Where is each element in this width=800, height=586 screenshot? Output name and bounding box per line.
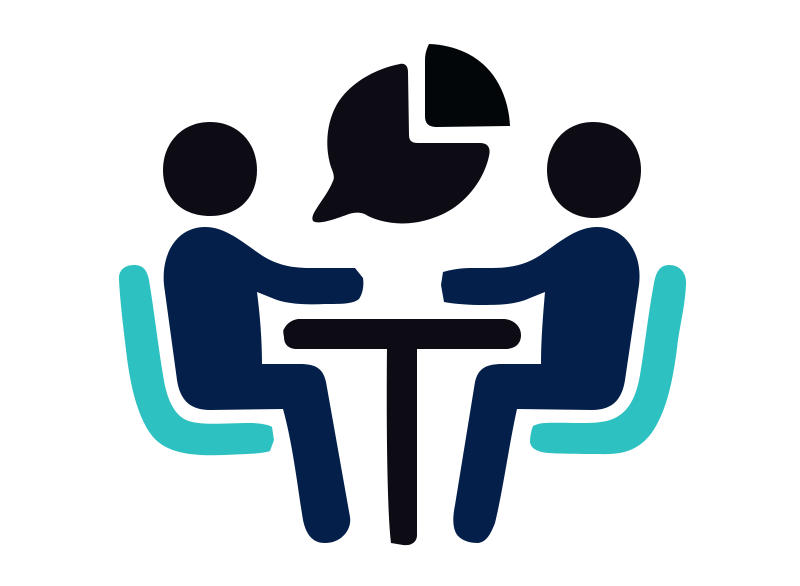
person: right [441,122,686,543]
table leg [387,345,417,545]
head: left [163,122,257,216]
chair: right [530,265,686,454]
pie wedge: top right slice [425,44,510,127]
table top [283,319,521,349]
chair: left [119,265,274,455]
person: left [119,122,363,543]
table [283,319,521,545]
pie wedge: large speech bubble [312,64,490,223]
head: right [547,122,641,218]
body: left [164,227,363,543]
icon: pie chart speech bubble [312,44,510,223]
body: right [441,227,640,543]
